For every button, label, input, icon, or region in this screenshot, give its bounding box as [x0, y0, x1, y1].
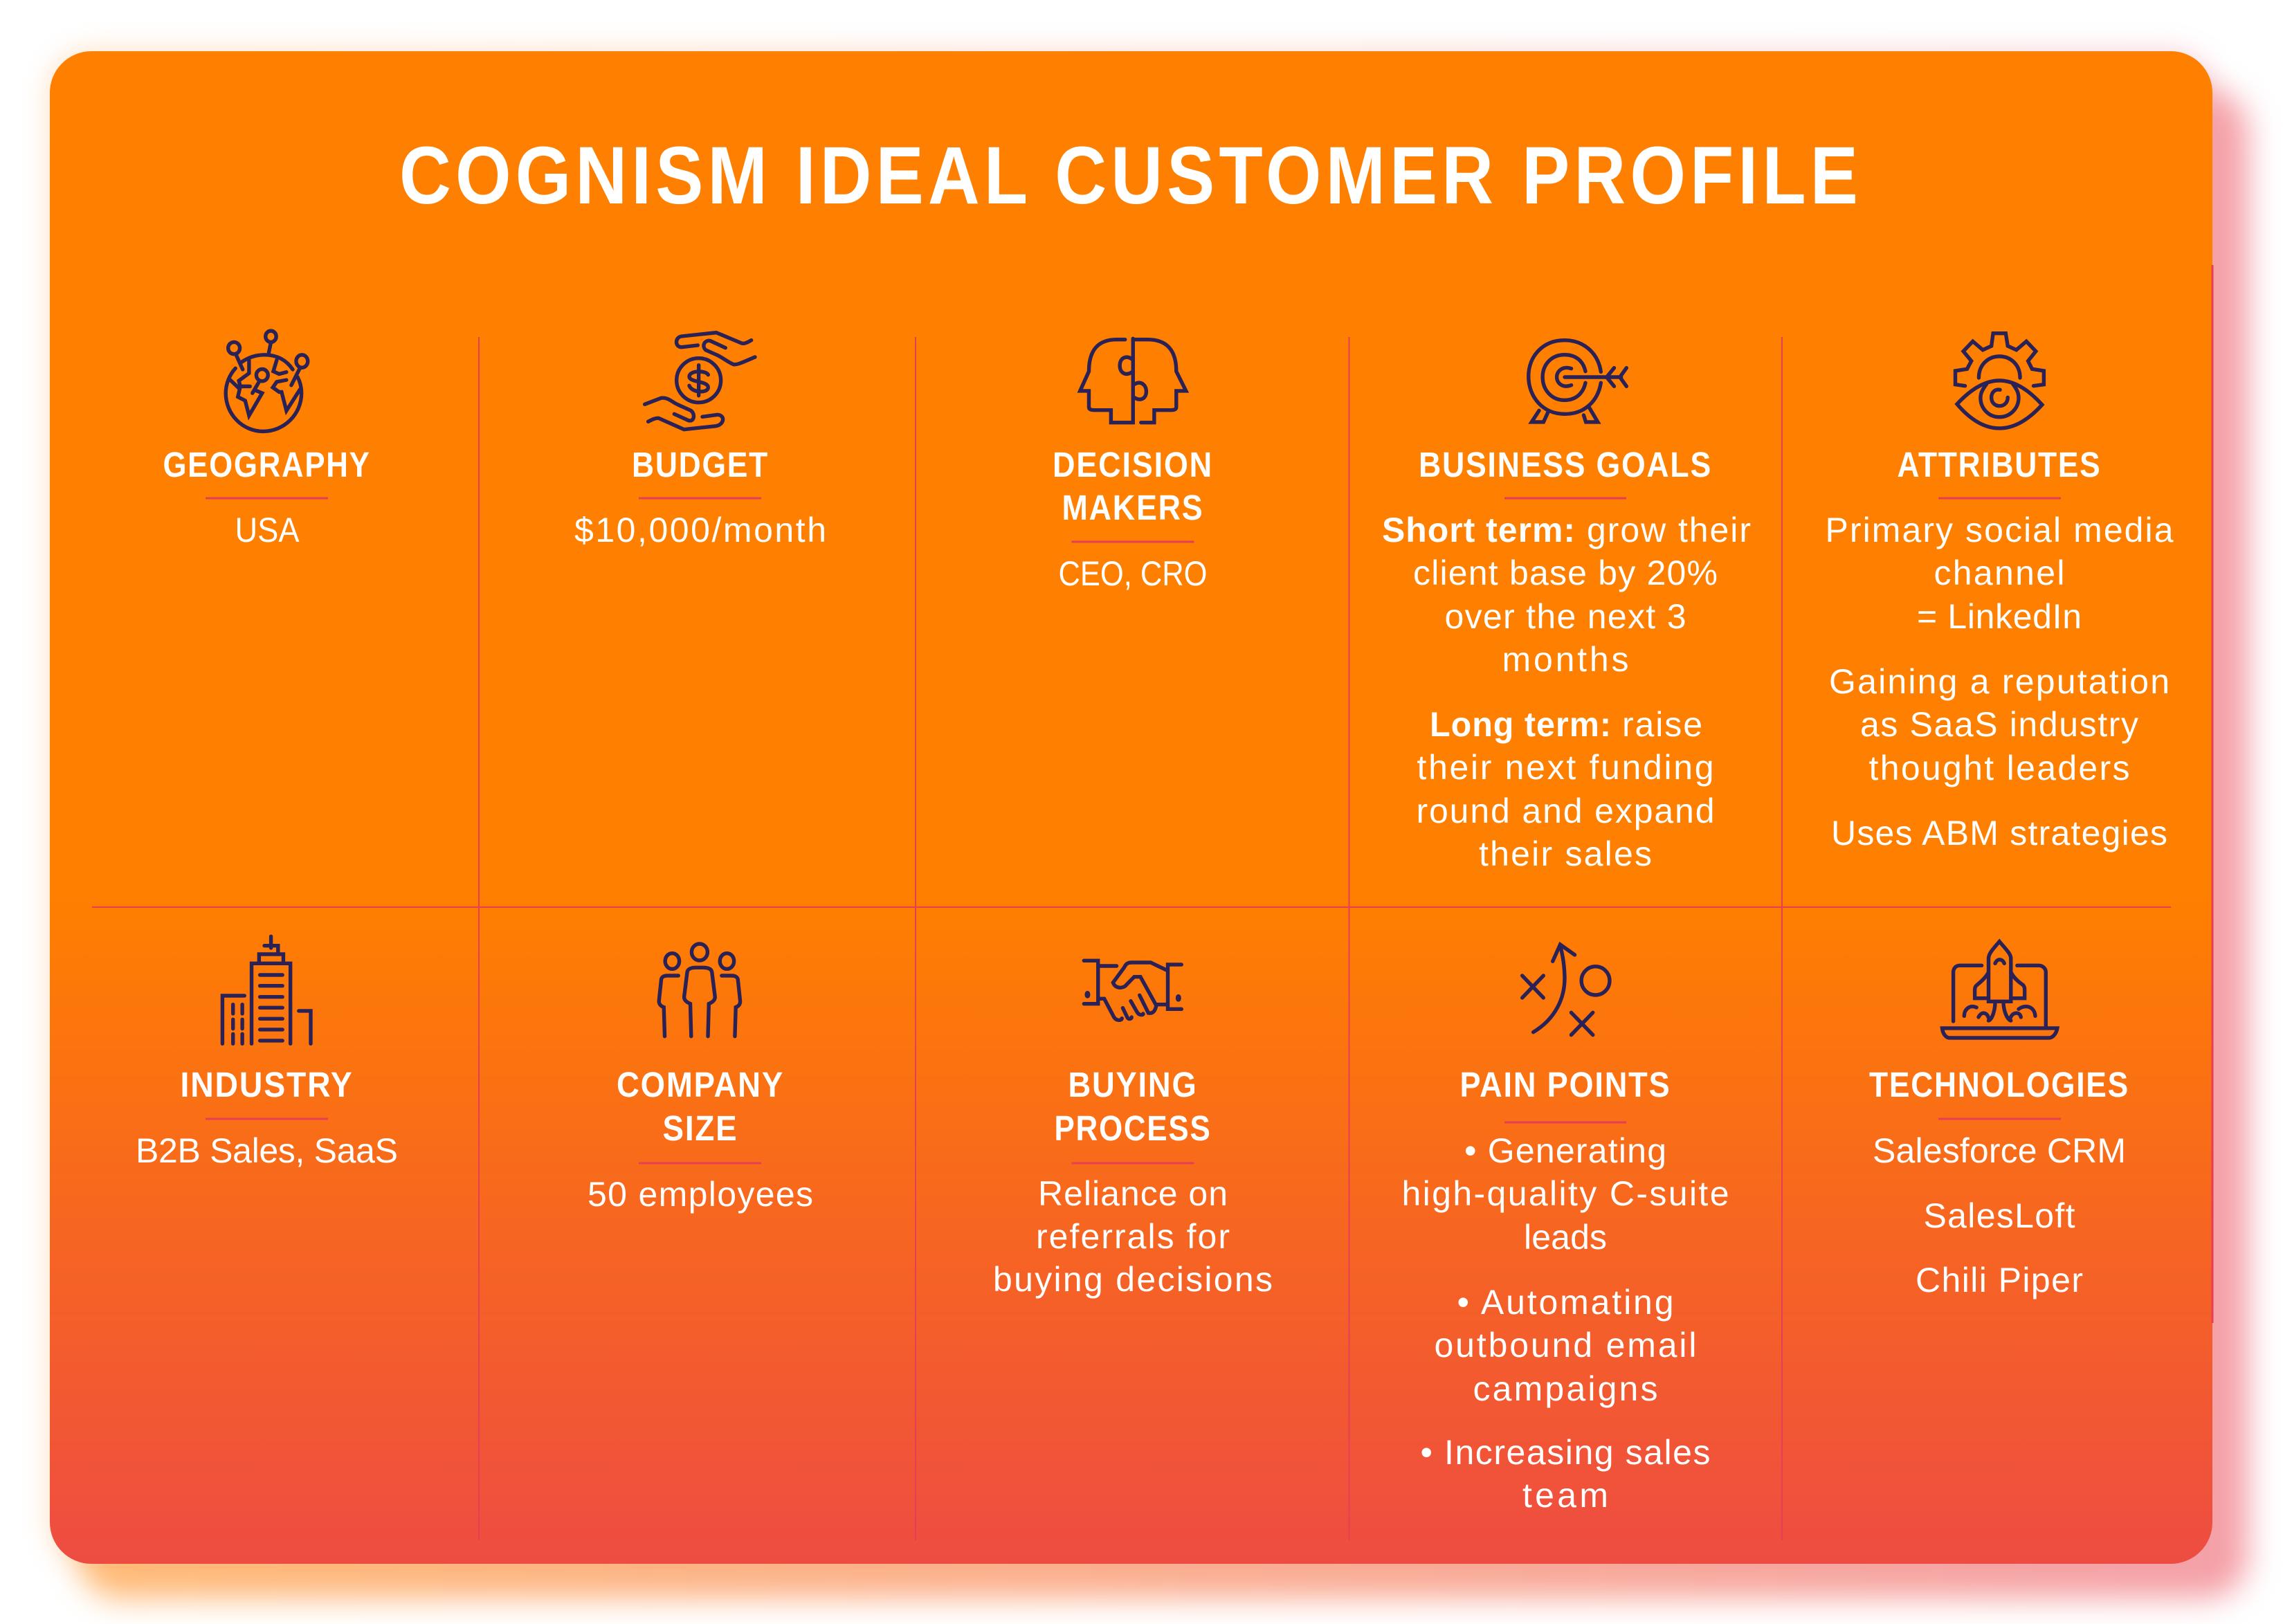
body text: buying decisions	[993, 1260, 1273, 1299]
body text: long term: their next funding	[1417, 748, 1713, 787]
panel: decision makers: MAKERS	[1062, 488, 1204, 527]
body text: = LinkedIn	[1917, 597, 2082, 636]
panel: decision makers	[1053, 338, 1213, 593]
panel: pain points	[1402, 945, 1729, 1515]
body text: short term: over the next 3	[1445, 597, 1686, 636]
heading: TECHNOLOGIES	[1869, 1065, 2129, 1104]
body text: Reliance on	[1038, 1174, 1228, 1213]
panel: company size: SIZE	[663, 1108, 738, 1148]
icon: handshake	[1084, 960, 1181, 1020]
body text: $10,000/month	[574, 511, 826, 549]
icon: rocket from laptop	[1942, 942, 2057, 1038]
heading: BUSINESS GOALS	[1419, 445, 1712, 484]
heading: GEOGRAPHY	[163, 445, 371, 484]
body text	[1402, 1131, 1729, 1515]
body text: long term: raise	[1622, 705, 1702, 744]
body text: short term	[1382, 511, 1751, 679]
icon: city buildings	[222, 936, 311, 1043]
body text: thought leaders	[1868, 749, 2130, 787]
body text: Uses ABM strategies	[1831, 814, 2167, 852]
panel: geography	[163, 331, 371, 549]
body text: 50 employees	[588, 1175, 813, 1214]
body text: channel	[1934, 554, 2065, 592]
body text: as SaaS industry	[1860, 705, 2138, 744]
icon: gear and eye	[1955, 334, 2044, 428]
body text: Gaining a reputation	[1829, 662, 2170, 701]
icon: strategy play	[1522, 945, 1610, 1035]
heading: PAIN POINTS	[1460, 1065, 1671, 1104]
icon: puzzle heads	[1080, 338, 1186, 423]
panel: business goals	[1382, 340, 1751, 873]
icon: hands and coin	[645, 333, 755, 430]
panel: buying process: PROCESS	[1055, 1108, 1211, 1148]
body text: outbound email	[1434, 1326, 1697, 1365]
panel: buying process	[993, 960, 1273, 1299]
body text: team	[1522, 1476, 1608, 1515]
heading: INDUSTRY	[180, 1065, 353, 1104]
body text: referrals for	[1036, 1217, 1230, 1256]
heading: ATTRIBUTES	[1898, 445, 2101, 484]
body text: Salesforce CRM	[1873, 1131, 2126, 1170]
panel: industry	[136, 936, 398, 1170]
body text: short term: Short term:	[1382, 511, 1576, 549]
body text: long term: Long term:	[1430, 705, 1612, 744]
body text: short term: months	[1502, 640, 1629, 679]
body text: CEO, CRO	[1059, 554, 1207, 593]
body text: Primary social media	[1826, 511, 2174, 549]
body text: Chili Piper	[1916, 1261, 2083, 1299]
panel: company size	[588, 944, 813, 1214]
body text: SalesLoft	[1924, 1196, 2075, 1235]
body text: leads	[1524, 1218, 1607, 1257]
heading: BUDGET	[632, 445, 769, 484]
panel: technologies	[1869, 942, 2129, 1299]
body text: long term: their sales	[1479, 834, 1652, 873]
panel: attributes	[1826, 334, 2174, 852]
body text: USA	[235, 511, 300, 549]
body text: • Increasing sales	[1420, 1433, 1711, 1472]
body text: B2B Sales, SaaS	[136, 1131, 398, 1170]
icon: target and arrow	[1529, 340, 1626, 422]
body text: • Generating	[1464, 1131, 1666, 1170]
body text	[1826, 511, 2174, 852]
heading: COMPANY	[617, 1065, 784, 1104]
body text: campaigns	[1473, 1369, 1658, 1408]
body text: long term	[1416, 705, 1715, 873]
heading: DECISION	[1053, 445, 1213, 484]
body text: • Automating	[1457, 1283, 1673, 1322]
heading: BUYING	[1068, 1065, 1197, 1104]
body text: short term: grow their	[1587, 511, 1751, 549]
body text: high-quality C-suite	[1402, 1174, 1729, 1213]
icon: globe with pins	[226, 331, 308, 431]
body text	[993, 1174, 1273, 1299]
body text: short term: client base by 20%	[1413, 554, 1718, 592]
panel: budget	[574, 333, 826, 549]
body text	[1873, 1131, 2126, 1299]
icon: three people	[659, 944, 740, 1037]
title: COGNISM IDEAL CUSTOMER PROFILE	[399, 130, 1862, 221]
body text: long term: round and expand	[1416, 792, 1715, 830]
